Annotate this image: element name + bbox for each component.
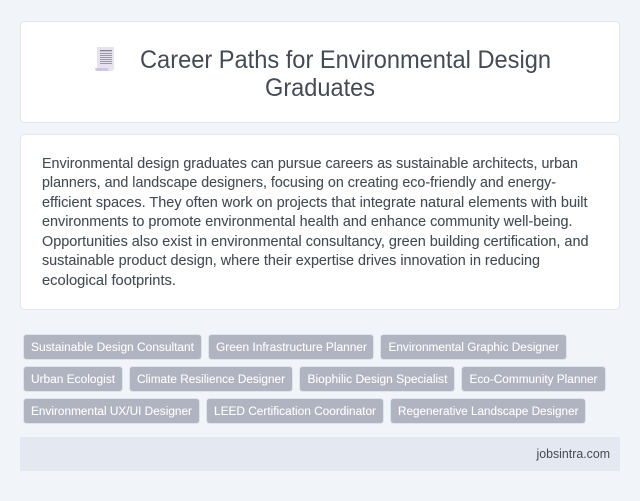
- footer: [20, 437, 620, 471]
- tag: Urban Ecologist: [31, 372, 116, 386]
- text block: description: sustainable product design, where their expertise drives innovation in reducing: [42, 253, 540, 269]
- tag: [208, 334, 374, 360]
- title: Career Paths for Environmental Design: [140, 46, 551, 74]
- tag: [24, 334, 202, 360]
- panel: description: [20, 134, 620, 310]
- footer source text: jobsintra.com: [536, 447, 610, 461]
- tag: [24, 398, 200, 424]
- tag: [390, 398, 586, 424]
- tag: LEED Certification Coordinator: [214, 404, 376, 418]
- tag: Regenerative Landscape Designer: [398, 404, 578, 418]
- tag: Environmental UX/UI Designer: [31, 404, 192, 418]
- title: Graduates: [265, 74, 375, 102]
- text block: description: ecological footprints.: [42, 273, 176, 289]
- tag: [380, 334, 566, 360]
- tag: Sustainable Design Consultant: [31, 340, 195, 354]
- tag: Green Infrastructure Planner: [216, 340, 367, 354]
- panel: header: [20, 22, 620, 122]
- tag: [24, 366, 122, 392]
- tag list: [24, 334, 606, 424]
- tag: [300, 366, 454, 392]
- tag: Environmental Graphic Designer: [388, 340, 559, 354]
- tag: Eco-Community Planner: [470, 372, 598, 386]
- tag: [130, 366, 292, 392]
- text block: description: Environmental design graduates can pursue careers as sustainable architects, urban: [42, 156, 578, 172]
- text block: description: environments to promote environmental health and enhance community well-being.: [42, 214, 572, 230]
- tag: Climate Resilience Designer: [137, 372, 285, 386]
- text block: description: efficient spaces. They often work on projects that integrate natural elements with built: [42, 195, 588, 211]
- tag: [462, 366, 606, 392]
- tag: Biophilic Design Specialist: [308, 372, 448, 386]
- text block: description: planners, and landscape designers, focusing on creating eco-friendly and energy-: [42, 175, 556, 191]
- text block: description: Opportunities also exist in environmental consultancy, green building certification, and: [42, 234, 588, 250]
- icon: document scroll: [95, 47, 114, 71]
- tag: [206, 398, 384, 424]
